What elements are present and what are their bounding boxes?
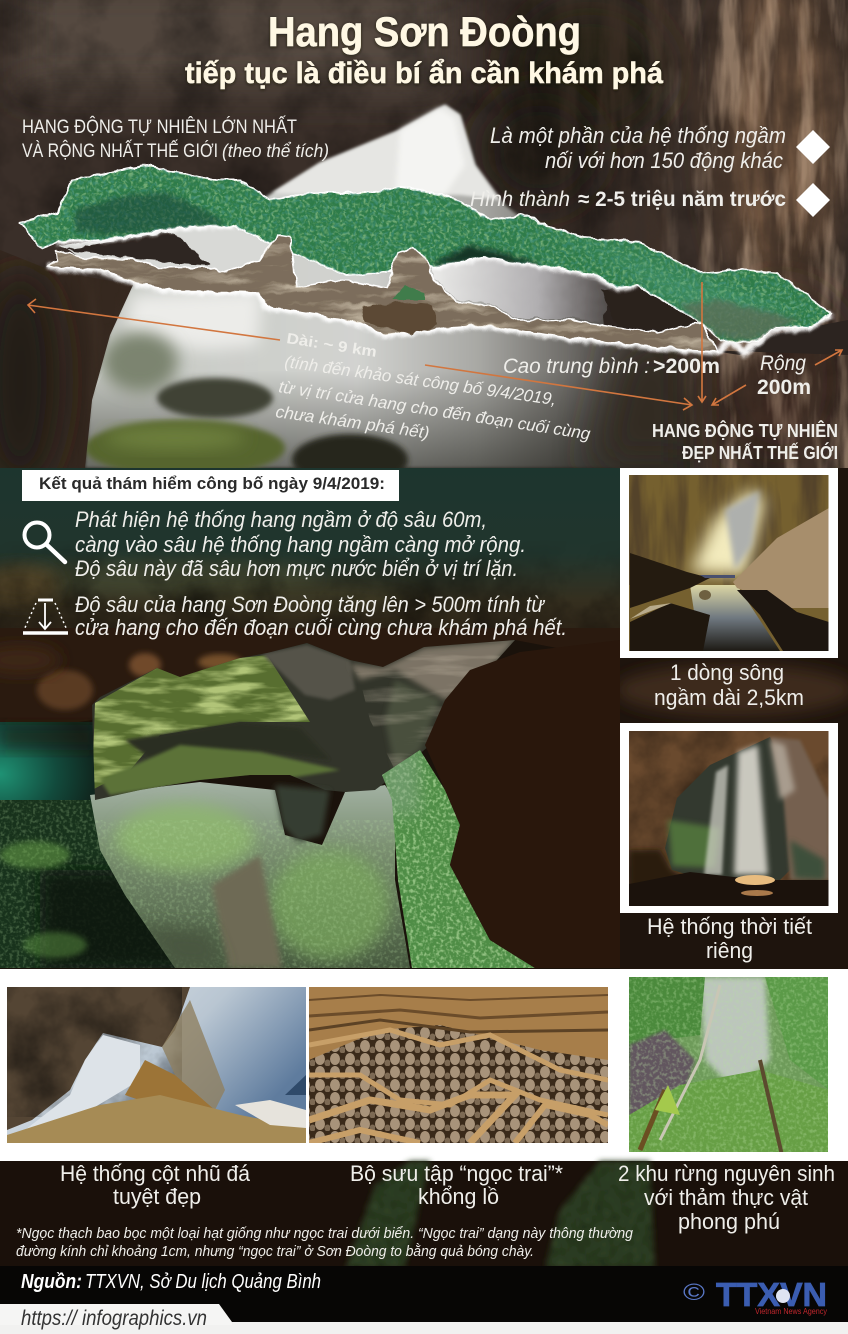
results heading box: Kết quả thám hiểm công bố ngày 9/4/2019: xyxy=(39,474,385,493)
caption: underground river xyxy=(654,660,804,710)
caption: pearls: Bộ sưu tập “ngọc trai”* xyxy=(350,1161,563,1186)
photo: cave pearls xyxy=(309,987,608,1143)
photo: cave weather xyxy=(620,723,838,913)
photo: forest xyxy=(629,977,828,1152)
photo: stalactites xyxy=(7,987,306,1143)
caption: cave weather: riêng xyxy=(706,938,753,963)
arrows: height and width xyxy=(698,282,842,405)
width label xyxy=(757,352,811,399)
caption: pearls: khổng lồ xyxy=(418,1184,499,1209)
cave opening xyxy=(85,105,690,486)
panel: photo gallery xyxy=(0,969,848,1152)
heading: largest natural cave xyxy=(22,116,329,162)
heading: largest natural cave: HANG ĐỘNG TỰ NHIÊN LỚN NHẤT xyxy=(22,116,297,138)
heading: largest natural cave: VÀ RỘNG NHẤT THẾ GIỚI xyxy=(22,140,218,162)
length label: Dài: ~ 9 km xyxy=(285,330,378,361)
icon: diamond xyxy=(796,130,830,164)
caption: forest: với thảm thực vật xyxy=(644,1185,808,1210)
mossy left floor xyxy=(0,800,190,970)
mossy band xyxy=(380,745,540,970)
finding: underground system: Độ sâu này đã sâu hơn mực nước biển ở vị trí lặn. xyxy=(75,556,518,581)
dark blob under rock xyxy=(275,785,330,842)
caption: cave weather: Hệ thống thời tiết xyxy=(647,914,812,939)
panel: cave overview xyxy=(0,0,848,490)
caption: forest xyxy=(618,1161,835,1234)
fact: underground system xyxy=(490,123,786,173)
green body xyxy=(20,165,831,343)
source: Nguồn: xyxy=(21,1271,82,1293)
panel: expedition results xyxy=(0,468,848,970)
icon: depth xyxy=(23,600,68,633)
fact: age: ≈ 2-5 triệu năm trước xyxy=(578,188,786,211)
left rock pillar xyxy=(0,250,133,468)
TTXVN logo xyxy=(683,1276,827,1316)
fact: age xyxy=(470,188,786,211)
height label: Cao trung bình : xyxy=(503,355,650,378)
source xyxy=(21,1271,321,1293)
teal pool xyxy=(0,722,95,802)
height label: >200m xyxy=(653,355,720,378)
website tab: https:// infographics.vn xyxy=(21,1307,207,1330)
footnote xyxy=(16,1225,634,1260)
finding: underground system xyxy=(75,507,526,581)
brown strip xyxy=(48,235,717,352)
width label: 200m xyxy=(757,376,811,399)
length label xyxy=(274,330,592,444)
finding: cave depth: cửa hang cho đến đoạn cuối cùng chưa khám phá hết. xyxy=(75,615,567,640)
caption: stalactites: tuyệt đẹp xyxy=(113,1184,201,1209)
caption: forest: phong phú xyxy=(678,1209,780,1234)
results heading box xyxy=(22,470,399,501)
caption: stalactites xyxy=(60,1161,251,1209)
length label: chưa khám phá hết) xyxy=(274,402,431,443)
TTXVN logo: Vietnam News Agency xyxy=(755,1307,827,1316)
panel: gallery captions xyxy=(0,1161,848,1269)
title: Hang Sơn Đoòng xyxy=(268,8,581,55)
fact: age: Hình thành xyxy=(470,188,570,211)
title xyxy=(185,8,663,90)
title: tiếp tục là điều bí ẩn cần khám phá xyxy=(185,57,663,90)
TTXVN logo: © xyxy=(683,1279,705,1305)
footnote: đường kính chỉ khoảng 1cm, nhưng “ngọc trai” ở Sơn Đoòng to bằng quả bóng chày. xyxy=(16,1243,534,1260)
right rock under tail xyxy=(600,290,848,355)
cave scene photo xyxy=(0,628,620,970)
pocket behind model xyxy=(60,225,300,290)
caption: cave weather xyxy=(647,914,812,963)
length label: từ vị trí cửa hang cho đến đoạn cuối cùng xyxy=(277,377,592,444)
footnote: *Ngọc thạch bao bọc một loại hạt giống như ngọc trai dưới biển. “Ngọc trai” dạng này thông thường xyxy=(16,1225,634,1242)
width label: Rộng xyxy=(760,352,806,375)
hanging rock xyxy=(85,635,525,800)
caption: underground river: 1 dòng sông xyxy=(670,660,784,685)
photo: underground river xyxy=(620,468,838,658)
finding: cave depth: Độ sâu của hang Sơn Đoòng tăng lên > 500m tính từ xyxy=(75,592,546,617)
caption: stalactites: Hệ thống cột nhũ đá xyxy=(60,1161,251,1186)
heading: most beautiful cave xyxy=(652,420,838,463)
finding: underground system: càng vào sâu hệ thống hang ngầm càng mở rộng. xyxy=(75,532,526,557)
caption: forest: 2 khu rừng nguyên sinh xyxy=(618,1161,835,1186)
height label xyxy=(503,355,720,378)
length label: (tính đến khảo sát công bố 9/4/2019, xyxy=(283,352,557,409)
finding: underground system: Phát hiện hệ thống hang ngầm ở độ sâu 60m, xyxy=(75,507,487,532)
TTXVN logo: TTXVN xyxy=(716,1276,827,1313)
icon: magnifier xyxy=(24,522,65,562)
ceiling xyxy=(0,628,620,725)
icon: diamond xyxy=(796,183,830,217)
source: TTXVN, Sở Du lịch Quảng Bình xyxy=(85,1271,321,1293)
heading: largest natural cave: (theo thể tích) xyxy=(222,141,329,161)
dark rock right xyxy=(425,640,620,968)
finding: cave depth xyxy=(75,592,567,640)
fact: underground system: nối với hơn 150 động khác xyxy=(545,148,783,173)
misty valley xyxy=(80,780,420,970)
caption: underground river: ngầm dài 2,5km xyxy=(654,685,804,710)
caption: pearls xyxy=(350,1161,563,1209)
cave 3D model xyxy=(15,160,840,360)
arrow: length xyxy=(28,299,692,410)
panel: footer xyxy=(0,1266,848,1334)
white glow xyxy=(48,267,831,353)
fact: underground system: Là một phần của hệ thống ngầm xyxy=(490,123,786,148)
